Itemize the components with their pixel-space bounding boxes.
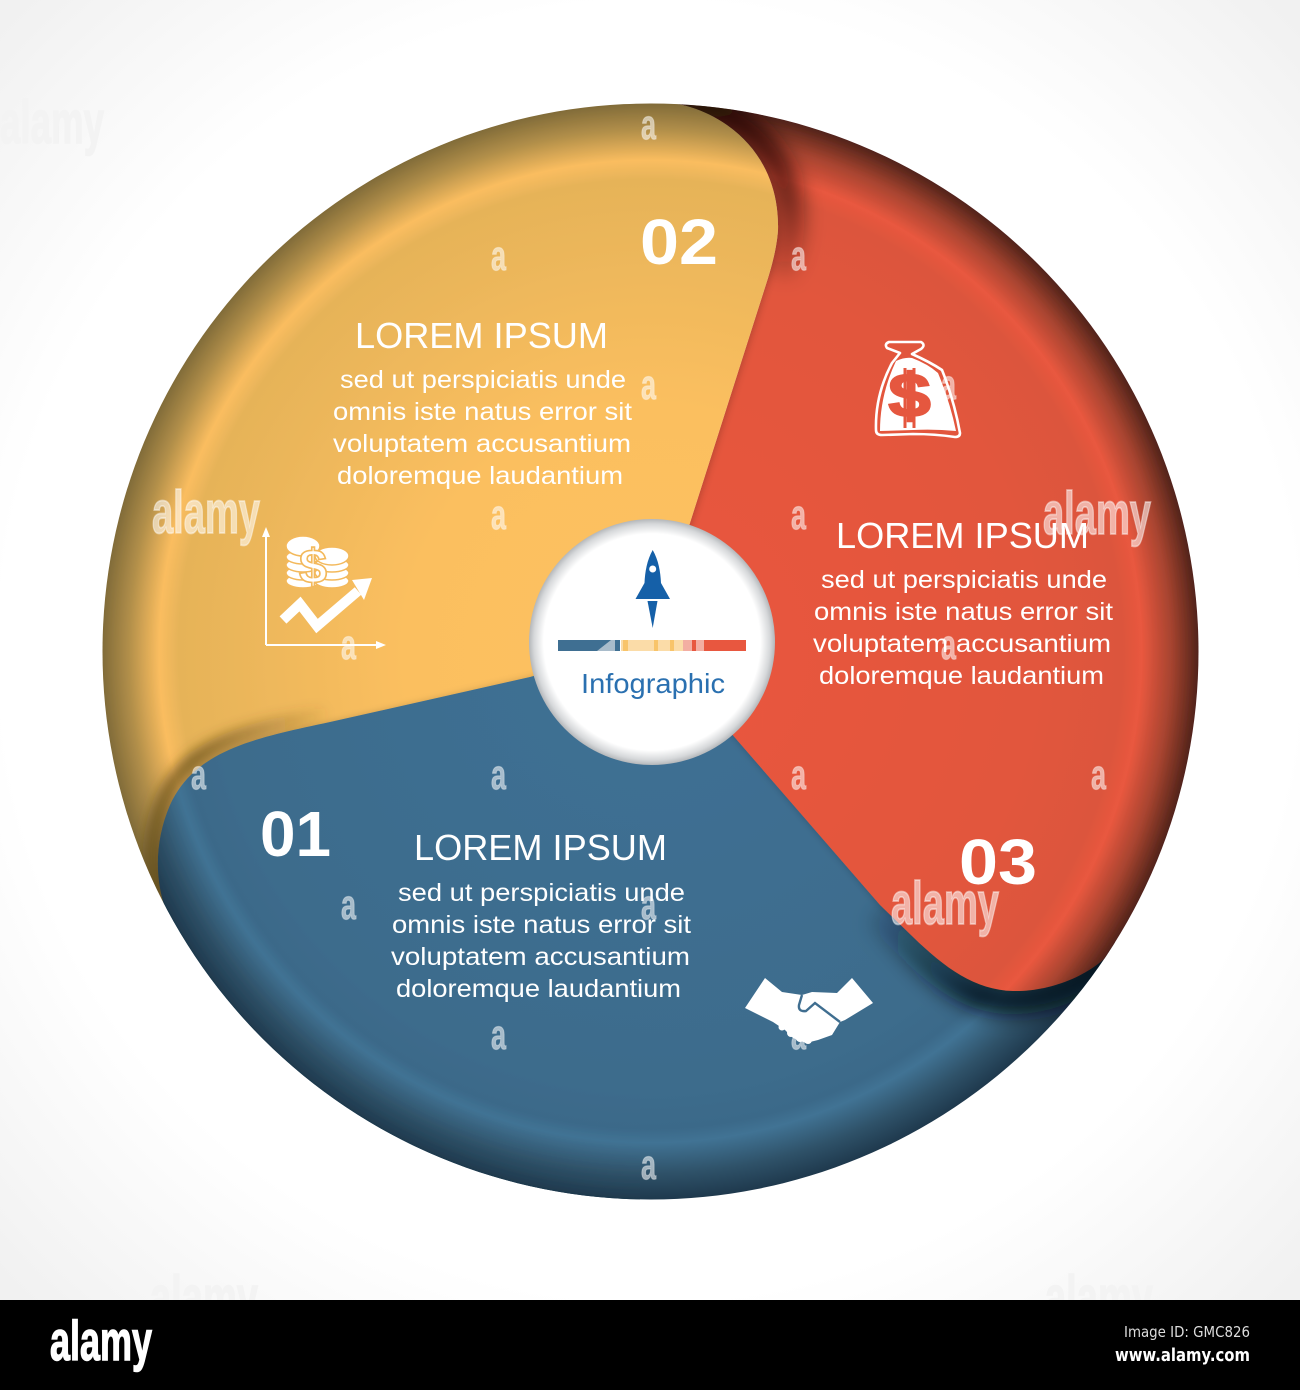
footer bar	[0, 1300, 1300, 1390]
number 01: 01	[260, 798, 331, 870]
icon: rocket	[636, 550, 670, 628]
text block: red panel: doloremque laudantium	[819, 662, 1104, 690]
text block: blue panel: omnis iste natus error sit	[392, 911, 691, 939]
watermark: small letters: a	[191, 751, 206, 798]
number 03: 03	[959, 826, 1037, 898]
text block: red panel: sed ut perspiciatis unde	[821, 566, 1107, 594]
panel 01: blue overlap on yellow	[157, 674, 640, 1200]
watermark: small letters: a	[491, 751, 506, 798]
panel 01: blue segment	[162, 735, 1116, 1200]
text block: red panel: LOREM IPSUM	[836, 515, 1089, 556]
watermark: small letters: a	[491, 1011, 506, 1058]
shadow of yellow panel on red	[684, 101, 790, 276]
watermark: faint logos on the background: alamy	[0, 89, 104, 156]
footer logo: alamy	[50, 1309, 152, 1372]
watermark: large logos on the diagram: alamy	[891, 870, 999, 937]
footer image id: Image ID: GMC826	[1124, 1323, 1250, 1341]
watermark: faint logos on the background	[0, 89, 1153, 1331]
watermark: small letters: a	[341, 881, 356, 928]
watermark: faint logos on the background: alamy	[1045, 1264, 1153, 1331]
watermark: small letters: a	[641, 881, 656, 928]
label: Infographic: Infographic	[581, 668, 725, 699]
watermark: small letters: a	[341, 621, 356, 668]
text block: yellow panel: sed ut perspiciatis unde	[340, 366, 626, 394]
text block: red panel	[813, 515, 1113, 690]
watermark: small letters: a	[791, 751, 806, 798]
centre badge	[529, 519, 775, 765]
watermark: small letters: a	[1091, 751, 1106, 798]
watermark: small letters: a	[641, 1141, 656, 1188]
watermark: small letters: a	[641, 101, 656, 148]
text block: blue panel: LOREM IPSUM	[414, 827, 667, 868]
panel 03: red segment	[652, 103, 1203, 991]
watermark: small letters: a	[941, 621, 956, 668]
icon: money bag	[876, 342, 960, 437]
text block: yellow panel: doloremque laudantium	[337, 462, 623, 490]
watermark: small letters: a	[791, 232, 806, 279]
text block: blue panel: sed ut perspiciatis unde	[398, 879, 685, 907]
footer website: www.alamy.com	[1115, 1345, 1250, 1366]
watermark: small letters: a	[491, 491, 506, 538]
watermark: small letters: a	[791, 1011, 806, 1058]
text block: yellow panel: omnis iste natus error sit	[333, 398, 632, 426]
watermark: small letters: a	[941, 361, 956, 408]
text block: blue panel: voluptatem accusantium	[391, 943, 690, 971]
text block: red panel: voluptatem accusantium	[813, 630, 1111, 658]
icon: coins and growth chart: $	[299, 541, 327, 594]
text block: red panel: omnis iste natus error sit	[814, 598, 1113, 626]
circular diagram	[101, 101, 1203, 1206]
number 02: 02	[640, 206, 718, 278]
watermark: small letters: a	[491, 232, 506, 279]
watermark: large logos on the diagram: alamy	[152, 479, 260, 546]
icon: coins and growth chart	[262, 527, 386, 649]
watermark: small letters: a	[641, 361, 656, 408]
text block: yellow panel	[333, 315, 632, 490]
watermark: large logos on the diagram: alamy	[1043, 480, 1151, 547]
panel 02: yellow segment	[101, 103, 778, 905]
watermark: large logos on the diagram	[152, 479, 1151, 937]
text block: yellow panel: voluptatem accusantium	[333, 430, 631, 458]
icon: money bag: $	[888, 362, 931, 431]
watermark: small letters	[191, 101, 1106, 1188]
text block: yellow panel: LOREM IPSUM	[355, 315, 608, 356]
shadow of red panel on blue	[876, 914, 1113, 1000]
watermark: faint logos on the background: alamy	[150, 1264, 258, 1331]
watermark: small letters: a	[791, 491, 806, 538]
text block: blue panel	[391, 827, 691, 1003]
shadow of blue panel on yellow	[153, 715, 325, 898]
text block: blue panel: doloremque laudantium	[396, 975, 681, 1003]
colour bar	[558, 640, 746, 651]
icon: handshake	[745, 978, 873, 1044]
